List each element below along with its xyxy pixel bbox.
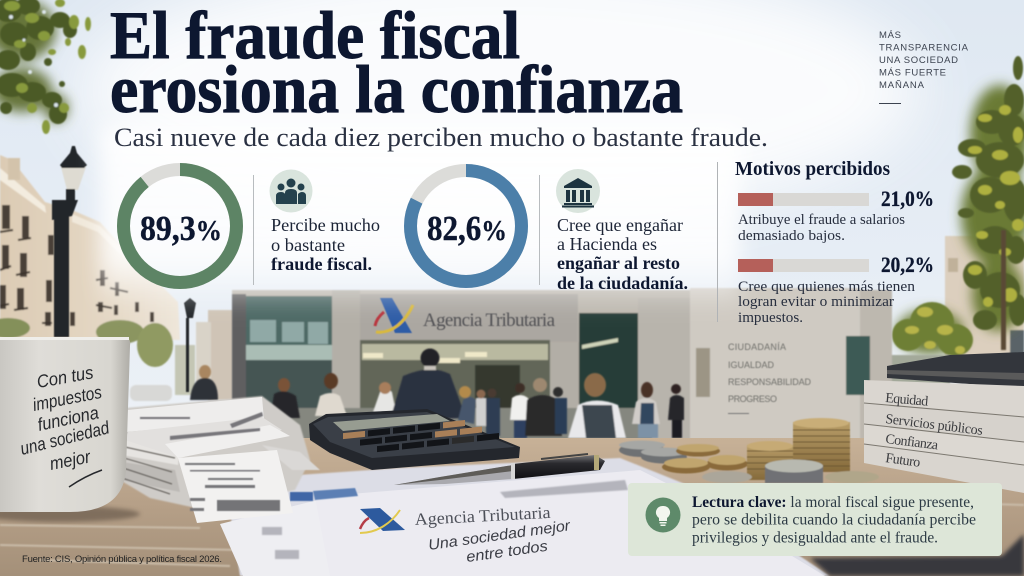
text: engañar a Hacienda: Cree que engañar	[557, 215, 683, 235]
text: salarios: demasiado bajos.	[738, 228, 845, 244]
photo: coins	[619, 418, 879, 483]
text: fraude fiscal	[271, 215, 380, 274]
text: paper handwriting: Una sociedad mejor	[427, 517, 572, 554]
icon: Agencia Tributaria logo on paper	[360, 508, 405, 533]
subtitle: Casi nueve de cada diez perciben mucho o bastante fraude.	[114, 123, 768, 152]
icon: people	[270, 170, 312, 212]
photo: notebook	[887, 352, 1024, 388]
text: paper handwriting: entre todos	[465, 538, 549, 566]
title: erosiona la confianza	[110, 51, 683, 127]
text: paper handwriting	[427, 517, 572, 566]
text: wall values: RESPONSABILIDAD	[728, 377, 812, 387]
barcode	[217, 500, 280, 511]
text: wall values: PROGRESO	[728, 394, 777, 404]
photo: mug	[0, 337, 130, 512]
callout: lectura clave	[628, 483, 1002, 556]
text: source: Fuente: CIS, Opinión pública y política fiscal 2026.	[22, 554, 222, 565]
text: mug handwriting: impuestos	[31, 382, 103, 415]
photo: tree top left	[0, 0, 91, 134]
photo: books with labels: Equidad	[885, 391, 929, 410]
text: mug handwriting: una sociedad	[18, 417, 112, 459]
text: building sign: Agencia Tributaria	[423, 310, 556, 331]
background: bright sky wash	[80, 0, 920, 220]
icon: street lamp	[52, 146, 196, 392]
text: lectura clave: pero se debilita cuando la ciudadanía percibe	[692, 512, 976, 528]
divider	[539, 175, 540, 285]
chart: donut 89,3%	[124, 170, 236, 282]
text: wall values	[728, 342, 812, 414]
side note top right: TRANSPARENCIA	[879, 42, 969, 54]
text: evitar impuestos: impuestos.	[738, 310, 803, 326]
divider	[253, 175, 254, 285]
side note top right: MÁS FUERTE	[879, 68, 946, 78]
text: engañar a Hacienda: de la ciudadanía.	[557, 273, 688, 293]
text: paper heading: Agencia Tributaria	[414, 503, 552, 529]
photo: books with labels: Servicios públicos	[885, 412, 984, 439]
text: engañar a Hacienda	[557, 215, 688, 293]
text: evitar impuestos: logran evitar o minimizar	[738, 294, 894, 310]
text: fraude fiscal: Percibe mucho	[271, 215, 380, 235]
side note top right	[879, 30, 969, 104]
text: evitar impuestos: Cree que quienes más tienen	[738, 279, 916, 295]
text: mug handwriting: Con tus	[35, 362, 95, 392]
photo: tree and building right	[842, 56, 1024, 442]
heading: motivos: Motivos percibidos	[735, 159, 890, 180]
text: evitar impuestos	[738, 279, 916, 326]
chart: donut 82,6%	[410, 170, 522, 282]
chart: donut 82,6%: 82,6%	[427, 209, 507, 248]
photo: receipts pile	[120, 396, 320, 523]
text: lectura clave: Lectura clave: la moral fiscal sigue presente,	[692, 494, 974, 511]
text: salarios: Atribuye el fraude a salarios	[738, 212, 905, 228]
text: mug handwriting	[18, 362, 112, 487]
text: lectura clave: privilegios y desigualdad ante el fraude.	[692, 530, 938, 546]
text: wall values: CIUDADANÍA	[728, 342, 786, 352]
photo: blurred car and people left	[130, 365, 347, 418]
photo: books with labels	[864, 380, 1024, 493]
photo: wooden table	[0, 438, 1024, 576]
text: fraude fiscal: fraude fiscal.	[271, 254, 372, 274]
photo: books with labels: Futuro	[884, 451, 921, 471]
side note top right: MÁS	[879, 30, 901, 41]
photo: calculator	[309, 409, 520, 470]
bar chart: evitar 20,2%	[738, 252, 934, 277]
bar chart: evitar 20,2%: 20,2%	[881, 252, 934, 277]
text: fraude fiscal: o bastante	[271, 235, 345, 255]
text: engañar a Hacienda: engañar al resto	[557, 253, 680, 273]
text: wall values: IGUALDAD	[728, 360, 774, 370]
chart: donut 89,3%: 89,3%	[140, 209, 222, 248]
side note top right: MAÑANA	[879, 80, 925, 91]
logo: building sign	[375, 298, 413, 333]
bar chart: salarios 21,0%	[738, 186, 934, 211]
photo: pen	[394, 454, 605, 485]
divider	[717, 162, 718, 322]
photo: crowd at entrance	[373, 348, 684, 438]
white wash behind statistics	[100, 125, 740, 310]
text: mug handwriting: funciona	[36, 402, 100, 435]
photo: left buildings	[0, 155, 233, 400]
photo: papers on table	[220, 458, 1024, 576]
side note top right: UNA SOCIEDAD	[879, 55, 958, 66]
text: salarios	[738, 212, 905, 244]
icon: institution	[556, 169, 600, 213]
photo: Agencia Tributaria building	[232, 288, 892, 442]
bar chart: salarios 21,0%: 21,0%	[881, 186, 934, 211]
panel: motivos percibidos	[735, 159, 934, 326]
text: engañar a Hacienda: a Hacienda es	[557, 234, 657, 254]
icon: light bulb	[646, 498, 680, 532]
text: lectura clave	[692, 494, 976, 546]
photo: books with labels: Confianza	[885, 432, 940, 454]
title	[110, 0, 683, 127]
text: mug handwriting: mejor	[48, 446, 93, 474]
